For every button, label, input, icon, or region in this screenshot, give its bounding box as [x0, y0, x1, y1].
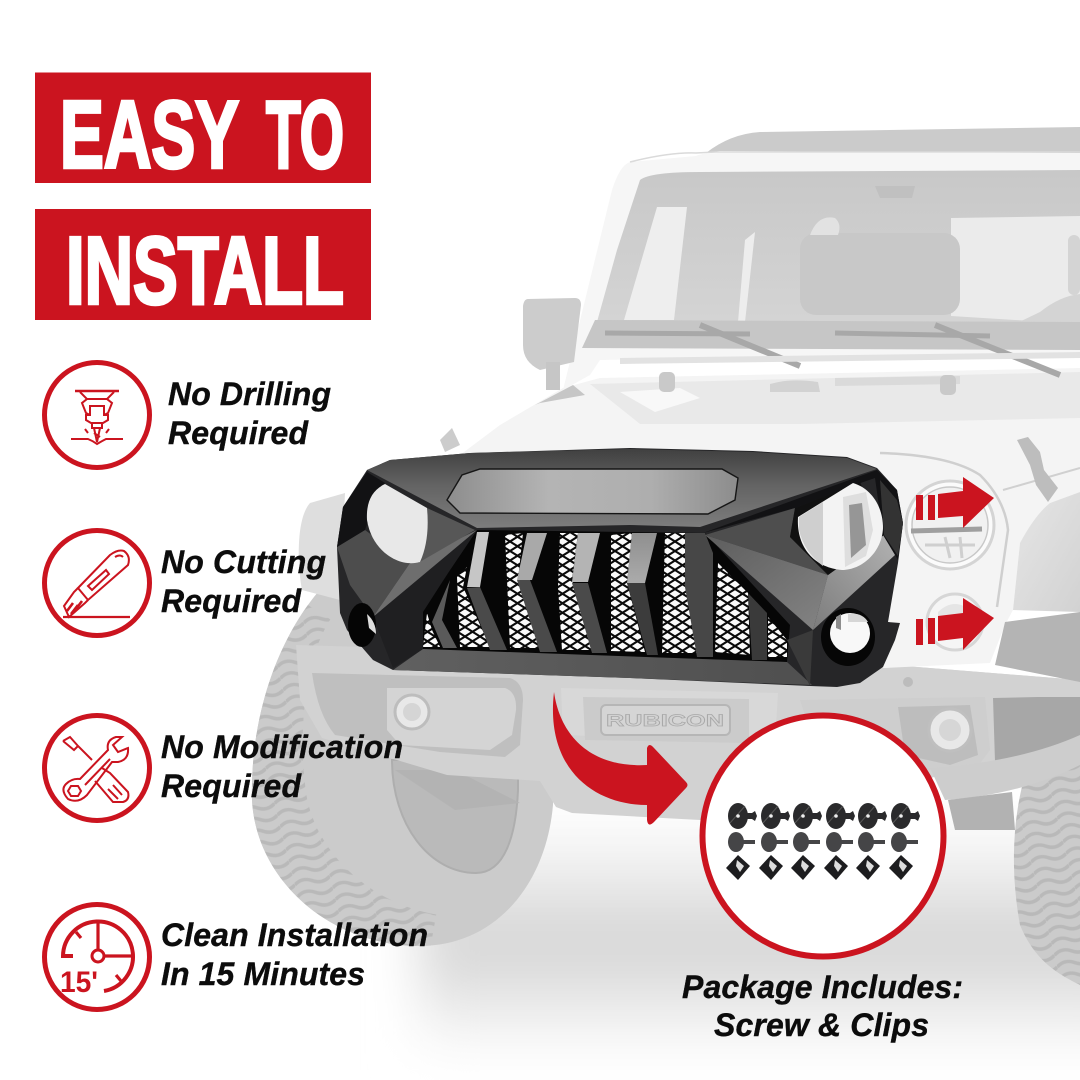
icon: clock 15 minutes [44, 904, 150, 1010]
hood and body [400, 368, 1080, 668]
right eye ring [790, 482, 884, 575]
label: no cutting: No Cutting [161, 544, 326, 580]
clips row [726, 855, 913, 880]
brow [367, 449, 877, 528]
far right facet [813, 535, 895, 630]
label: no drilling: No Drilling [168, 376, 331, 412]
lower right block [787, 630, 813, 686]
left side panel [337, 530, 410, 617]
label: clean installation: In 15 Minutes [161, 956, 365, 992]
label: no modification: Required [161, 768, 302, 804]
icon: clock 15 minutes: 15' [60, 966, 98, 999]
fender arc line [880, 453, 1008, 607]
rubicon badge text: RUBICON [606, 711, 724, 730]
right fender flare [1013, 492, 1080, 612]
label: no modification [161, 729, 403, 804]
title banner: install: INSTALL [66, 218, 344, 324]
screws row [728, 803, 920, 829]
icon: drilling [44, 362, 150, 468]
right fog opening [821, 608, 875, 666]
grille [337, 448, 903, 687]
mesh backing [423, 530, 790, 662]
centre plate [561, 688, 778, 742]
label: package includes: Package Includes: [682, 969, 963, 1005]
label: no modification: No Modification [161, 729, 403, 765]
turn signal [927, 594, 983, 650]
curved arrow: to package [553, 692, 688, 825]
left recess [312, 673, 523, 757]
right lower facet [705, 535, 828, 630]
title banner: install [35, 209, 371, 324]
right dark opening [993, 696, 1080, 762]
rivets row [728, 832, 918, 852]
lower bar [930, 735, 1080, 800]
label: clean installation: Clean Installation [161, 917, 428, 953]
ground shadow [420, 805, 1080, 1070]
left facet [373, 530, 477, 617]
left tyre [252, 590, 553, 950]
left dark corner [373, 530, 477, 668]
headlight [906, 481, 994, 569]
label: clean installation [161, 917, 428, 992]
right eye surround [703, 470, 903, 560]
wipers [605, 325, 1060, 375]
jeep photo backdrop [252, 127, 1080, 1070]
mirror [523, 298, 581, 390]
label: no drilling [168, 376, 331, 451]
left fog opening [348, 603, 376, 647]
brow plate [447, 469, 738, 514]
label: no cutting [161, 544, 326, 619]
grille outer shell [337, 448, 903, 687]
cowl [620, 352, 1080, 364]
left eye opening [367, 484, 428, 563]
label: no cutting: Required [161, 583, 302, 619]
mesh windows [423, 533, 787, 657]
arrow: to headlight [916, 477, 994, 528]
arrow: to turn signal [916, 598, 994, 650]
chevron bars [432, 532, 767, 660]
right recess [800, 697, 990, 770]
lower bar [393, 649, 812, 685]
title banner: easy to: EASY [60, 82, 239, 188]
bumper [296, 645, 1080, 830]
left eye surround [337, 472, 385, 547]
icon: cutter knife [44, 530, 150, 636]
label: package includes [682, 969, 963, 1043]
left fender [299, 493, 345, 600]
label: package includes: Screw & Clips [714, 1007, 929, 1043]
label: no drilling: Required [168, 415, 309, 451]
package callout circle [702, 716, 944, 956]
suspension under bumper [395, 770, 520, 810]
hood latch [1017, 437, 1058, 502]
right tyre [1014, 735, 1080, 985]
right upper facet [705, 508, 828, 575]
icon: wrench and screwdriver [44, 716, 150, 820]
title banner: easy to: TO [266, 82, 344, 188]
left eye cheek [418, 508, 475, 563]
right dark band [880, 480, 903, 556]
windshield glass [582, 170, 1080, 350]
right eye opening [798, 483, 883, 570]
windshield frame [563, 127, 1080, 390]
